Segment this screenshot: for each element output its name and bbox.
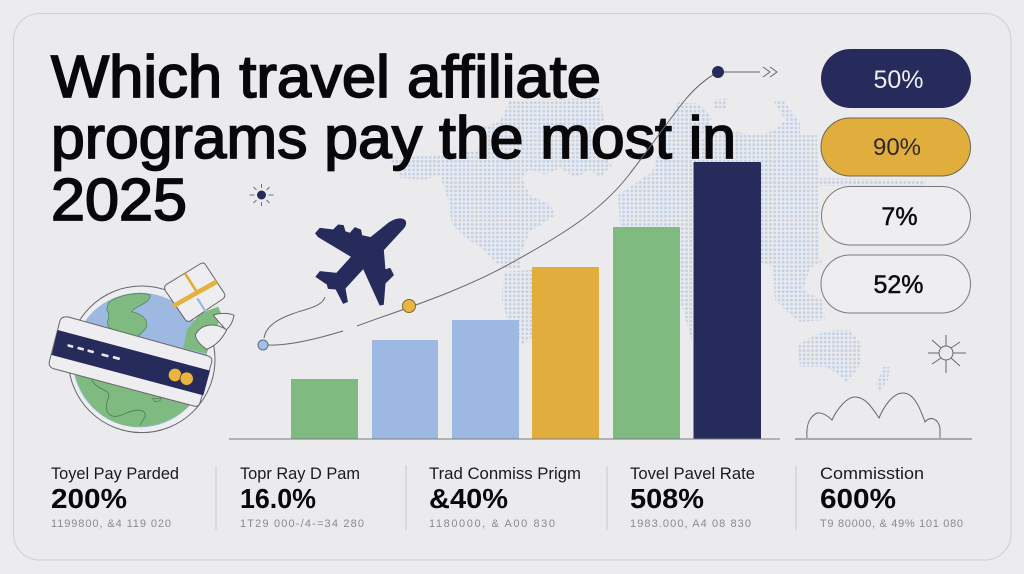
- illustration: globe with credit card and gift: [49, 263, 234, 433]
- title: 2025: [51, 167, 187, 233]
- stat: Toyel Pay Parded: [51, 464, 179, 530]
- stat: Topr Ray D Pam: 16.0%: [240, 483, 316, 514]
- stat: Tovel Pavel Rate: [630, 464, 755, 530]
- dotted world map: [390, 98, 925, 392]
- stat: Trad Conmiss Prigm: 1180000, & A00 830: [429, 518, 555, 530]
- title: Which travel affiliate: [51, 44, 601, 110]
- pill: 52%: [821, 255, 970, 313]
- pill: 7%: 7%: [881, 203, 918, 231]
- title: programs pay the most in: [51, 105, 736, 171]
- stat: Toyel Pay Parded: 1199800, &4 119 020: [51, 518, 171, 530]
- growth curve with markers: [258, 66, 777, 350]
- bar chart: [229, 162, 780, 439]
- stat: Tovel Pavel Rate: Tovel Pavel Rate: [630, 464, 755, 483]
- pill: 52%: 52%: [873, 271, 924, 299]
- pill: 50%: 50%: [873, 66, 924, 94]
- stat: Trad Conmiss Prigm: [429, 464, 581, 530]
- stat: Topr Ray D Pam: [240, 464, 364, 530]
- icon: sun small navy: [250, 184, 274, 206]
- globe: [68, 286, 222, 433]
- stat: Commission: 600%: [820, 483, 896, 514]
- stat: Toyel Pay Parded: 200%: [51, 483, 127, 514]
- pill: 90%: 90%: [873, 134, 921, 161]
- stat: Toyel Pay Parded: Toyel Pay Parded: [51, 464, 179, 483]
- leaf shapes: [195, 313, 234, 349]
- icon: airplane: [316, 219, 406, 305]
- dividers: [216, 465, 796, 530]
- title: [51, 44, 736, 233]
- pill: 7%: [822, 186, 970, 245]
- stat: Trad Conmiss Prigm: Trad Conmiss Prigm: [429, 464, 581, 483]
- stat: Commission: T9 80000, & 49% 101 080: [820, 518, 963, 530]
- stat: Tovel Pavel Rate: 1983.000, A4 08 830: [630, 518, 751, 530]
- icon: outline sun: [928, 335, 966, 373]
- icon: cloud hills outline: [795, 393, 972, 439]
- pill: 90%: [821, 118, 970, 176]
- stat: Trad Conmiss Prigm: &40%: [429, 483, 508, 514]
- credit card: [49, 317, 212, 406]
- pill: 50%: [821, 49, 971, 108]
- stat: Commission: [820, 464, 963, 530]
- stat: Topr Ray D Pam: 1T29 000-/4-=34 280: [240, 518, 364, 530]
- gift: [165, 263, 225, 321]
- stat: Topr Ray D Pam: Topr Ray D Pam: [240, 464, 360, 483]
- stat: Commission: Commisstion: [820, 464, 924, 483]
- stat: Tovel Pavel Rate: 508%: [630, 483, 704, 514]
